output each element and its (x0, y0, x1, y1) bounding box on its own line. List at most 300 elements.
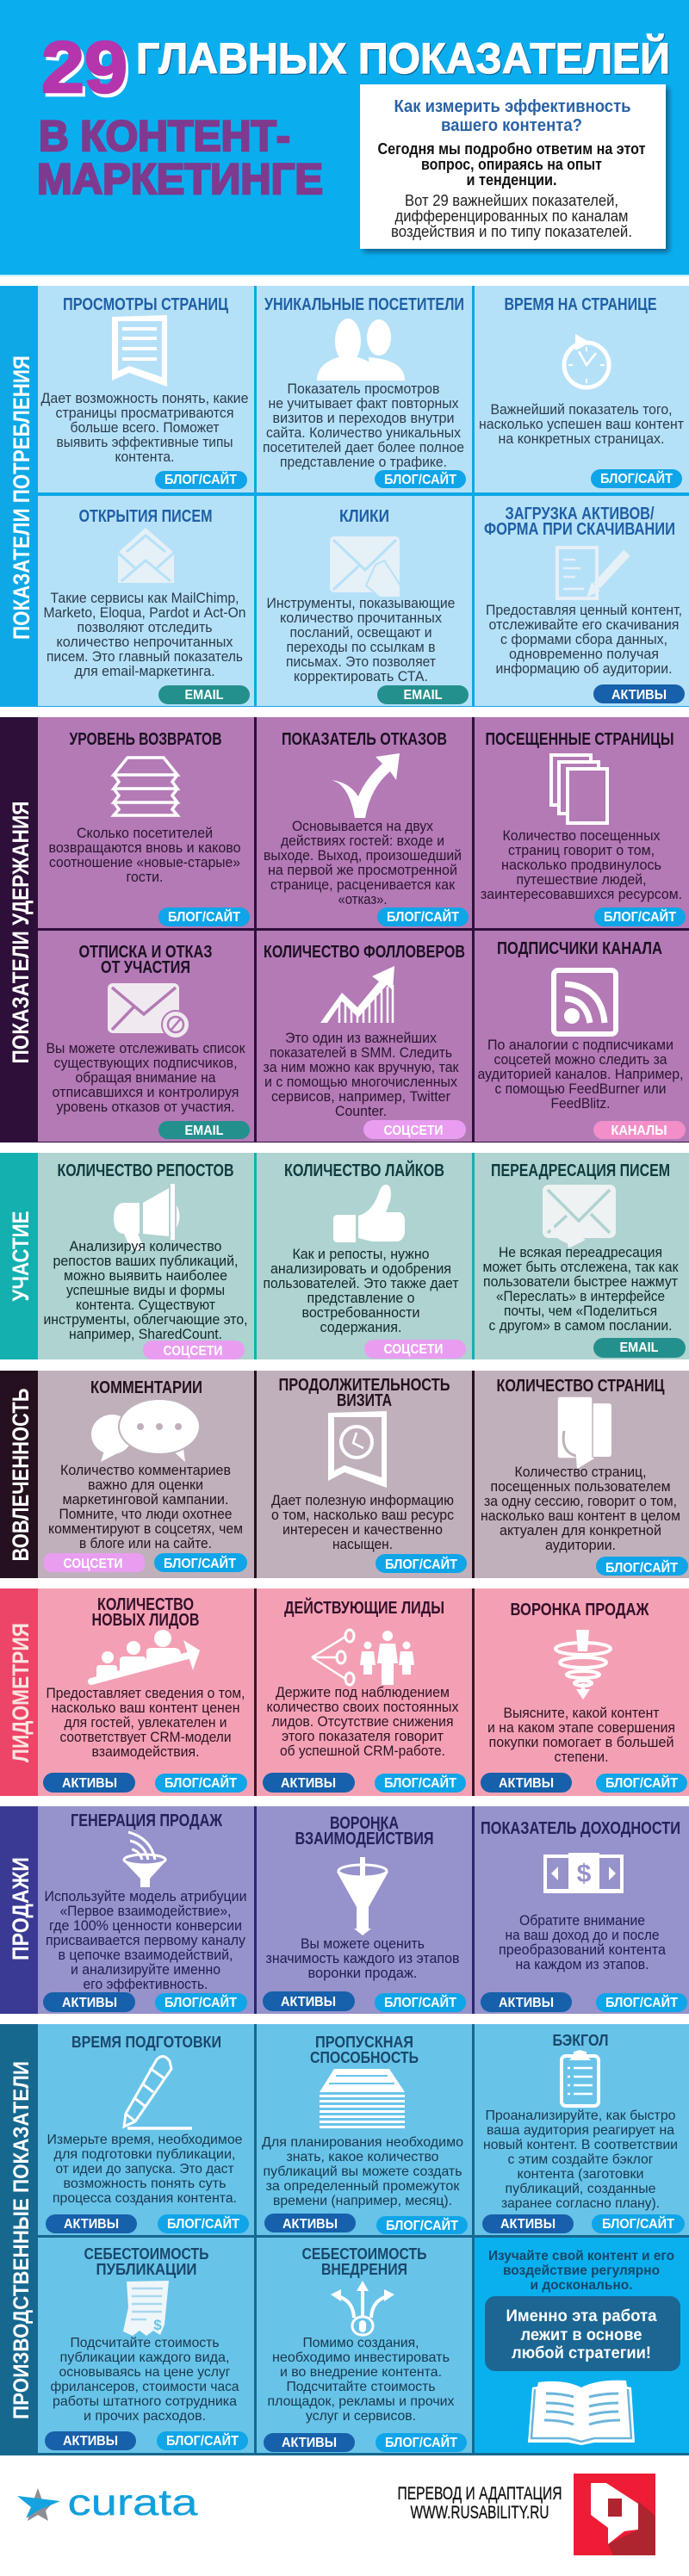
badge: БЛОГ/САЙТ (386, 2218, 458, 2233)
icon: envelope with hand (330, 536, 400, 598)
text: Помимо создания, (303, 2336, 419, 2350)
badge: АКТИВЫ (281, 1776, 336, 1791)
text: за ним можно как вручную, так (264, 1059, 459, 1075)
text: соотношение «новые-старые» (49, 854, 240, 870)
badge (375, 1774, 466, 1793)
text: комментируют в соцсетях, чем (48, 1520, 243, 1537)
text (483, 2108, 678, 2211)
text: например, SharedCount. (69, 1326, 222, 1342)
heading (301, 2245, 427, 2278)
text: Подсчитайте стоимость (71, 2336, 219, 2350)
text: аудитории. (545, 1537, 616, 1553)
text (264, 1246, 459, 1335)
heading: ВРЕМЯ ПОДГОТОВКИ (71, 2034, 221, 2051)
icon: funnel with arrow (337, 1857, 388, 1935)
card: воронка продаж (475, 1588, 689, 1796)
text: с формами сбора данных, (500, 631, 667, 647)
icon: pages with arrow (557, 1396, 611, 1469)
card: продолжительность визита (257, 1371, 472, 1578)
badge (481, 1773, 572, 1793)
card: воронка взаимодействия (257, 1806, 472, 2014)
logo: curata: curata (67, 2482, 198, 2523)
text: и во внедрение контента. (280, 2365, 442, 2380)
badge: КАНАЛЫ (611, 1124, 667, 1138)
badge: БЛОГ/САЙТ (167, 2216, 239, 2232)
icon: open envelope (118, 528, 174, 583)
badge (376, 1554, 467, 1573)
text: Marketo, Eloqua, Pardot и Act-On (43, 604, 246, 621)
badge: АКТИВЫ (62, 1996, 117, 2010)
icon: clipboard (562, 2050, 599, 2106)
text: услуг и сервисов. (306, 2409, 416, 2424)
text: уровень отказов от участия. (57, 1099, 234, 1115)
text: одновременно получая (509, 646, 659, 662)
callout: лежит в основе (520, 2326, 642, 2344)
text: переходы по ссылкам в (286, 639, 436, 655)
text (47, 1685, 245, 1760)
badge (45, 2431, 136, 2450)
badge (263, 1773, 355, 1793)
text: Это один из важнейших (285, 1030, 437, 1046)
text: для гостей, увлекателен и (64, 1714, 227, 1731)
heading: БЭКГОЛ (553, 2032, 608, 2049)
text: Проанализируйте, как быстро (486, 2108, 676, 2123)
heading: КЛИКИ (339, 507, 389, 526)
card: уникальные посетители (257, 286, 472, 492)
icon: check arrow (331, 753, 400, 818)
text: в цепочке взаимодействий, (59, 1947, 233, 1963)
badge (481, 1992, 572, 2012)
card: переадресация писем (475, 1153, 689, 1359)
text: выявить эффективные типы (57, 434, 233, 450)
text (499, 1912, 667, 1972)
badge (43, 1992, 135, 2012)
text (48, 825, 241, 885)
badge: БЛОГ/САЙТ (605, 1775, 678, 1791)
heading (79, 943, 212, 977)
card: загрузка активов (475, 496, 689, 706)
badge: EMAIL (620, 1341, 658, 1355)
intro box: Вот 29 важнейших показателей, (405, 192, 618, 209)
icon: envelope blocked (108, 983, 189, 1038)
text: присваивается первому каналу (46, 1932, 245, 1948)
text: насыщен. (332, 1536, 393, 1552)
heading (295, 1814, 434, 1848)
text: маркетинговой кампании. (62, 1491, 229, 1508)
heading: ПРОСМОТРЫ СТРАНИЦ (63, 295, 228, 314)
text: площадок, рекламы и прочих (267, 2394, 455, 2409)
text: путешествие людей, (517, 871, 646, 888)
text: показателей в SMM. Следить (270, 1044, 452, 1061)
card: себестоимость публикации (38, 2238, 254, 2453)
badge: БЛОГ/САЙТ (384, 472, 456, 487)
heading (91, 1595, 200, 1630)
sidebar label: ПОКАЗАТЕЛИ УДЕРЖАНИЯ (8, 801, 34, 1064)
text: Дает возможность понять, какие (41, 390, 248, 406)
text: Дает полезную информацию (271, 1492, 454, 1508)
credit text: WWW.RUSABILITY.RU (410, 2503, 549, 2523)
text: контента (заготовки (517, 2167, 644, 2182)
icon: clock (564, 334, 609, 387)
icon: tornado funnel (556, 1630, 611, 1700)
badge: БЛОГ/САЙТ (168, 909, 240, 925)
text: репостов ваших публикаций, (53, 1253, 238, 1269)
badge (596, 1993, 687, 2012)
text: публикации каждого вида, (60, 2350, 229, 2365)
card: количество репостов (38, 1153, 254, 1359)
heading: ЗАГРУЗКА АКТИВОВ/ (505, 505, 655, 523)
text: этого показателя говорит (282, 1728, 444, 1744)
card: отписка (38, 931, 254, 1142)
text: больше всего. Поможет (71, 419, 220, 436)
icon: people (317, 319, 405, 381)
sidebar label: ПОКАЗАТЕЛИ ПОТРЕБЛЕНИЯ (9, 356, 34, 640)
text: за определенный промежуток (265, 2179, 461, 2194)
card: себестоимость внедрения (257, 2238, 472, 2453)
text: для подготовки публикации, (53, 2147, 236, 2162)
heading: КОЛИЧЕСТВО (97, 1595, 194, 1614)
text: Измерьте время, необходимое (47, 2133, 243, 2147)
sidebar label: ПРОДАЖИ (8, 1857, 34, 1960)
badge (158, 1121, 250, 1139)
badge (154, 1553, 247, 1572)
card: бэкгол (475, 2024, 689, 2235)
text (43, 1238, 248, 1342)
icon: growth chart (320, 966, 394, 1023)
text: представление о трафике. (280, 454, 447, 470)
text: Предоставляет сведения о том, (47, 1685, 245, 1701)
text: и на каком этапе совершения (487, 1719, 675, 1736)
text: Важнейший показатель того, (491, 401, 672, 418)
icon: chat bubbles (91, 1399, 200, 1462)
heading: УРОВЕНЬ ВОЗВРАТОВ (69, 730, 222, 749)
badge: СОЦСЕТИ (164, 1344, 222, 1359)
text: письмах. Это позволяет (286, 653, 436, 670)
badge (482, 2214, 574, 2233)
text (265, 1935, 460, 1981)
text: пользователи быстрее нажмут (483, 1273, 678, 1290)
badge: БЛОГ/САЙТ (385, 1557, 457, 1572)
badge (155, 1993, 247, 2012)
card: closing message (475, 2238, 689, 2453)
card: количество страниц (475, 1371, 689, 1578)
heading: СПОСОБНОСТЬ (310, 2049, 419, 2066)
card: просмотры страниц (38, 286, 254, 492)
badge: АКТИВЫ (499, 1996, 554, 2010)
badge: СОЦСЕТИ (64, 1557, 122, 1571)
text: насколько продвинулось (501, 857, 661, 873)
text: его эффективность. (83, 1976, 208, 1992)
text: процесса создания контента. (53, 2191, 237, 2206)
text: значимость каждого из этапов (265, 1950, 460, 1966)
text: и с помощью многочисленных (264, 1074, 457, 1090)
badge (377, 685, 469, 704)
text: соцсетей можно следить за (494, 1051, 667, 1068)
text (481, 827, 682, 902)
text: посещенных пользователем (491, 1478, 670, 1495)
panel: показатели удержания (0, 717, 689, 1142)
icon: forwarded envelope (543, 1185, 616, 1248)
text: лидов. Отсутствие снижения (272, 1713, 453, 1730)
title line 2 (37, 112, 323, 203)
icon: money (543, 1853, 624, 1893)
icon: open book (528, 2381, 635, 2445)
text: «отказ». (338, 891, 388, 907)
text: контента. Существуют (76, 1297, 215, 1313)
icon: pencil (124, 2056, 192, 2128)
badge (377, 907, 469, 926)
text (41, 390, 248, 465)
text: на ваш доход до и после (505, 1927, 660, 1943)
heading: СЕБЕСТОИМОСТЬ (84, 2245, 209, 2263)
text: Выясните, какой контент (503, 1705, 660, 1721)
badge (158, 907, 250, 926)
heading (84, 2245, 209, 2278)
text: отписавшихся и контролируя (52, 1084, 239, 1100)
badge (155, 471, 247, 489)
text: содержания. (320, 1319, 401, 1335)
badge (593, 684, 685, 703)
text: количество своих постоянных (267, 1699, 459, 1715)
badge: БЛОГ/САЙТ (604, 909, 676, 925)
badge (376, 2216, 468, 2234)
panel: участие (0, 1153, 689, 1359)
text: Не всякая переадресация (499, 1244, 662, 1260)
text: информацию об аудитории. (496, 660, 672, 677)
badge: БЛОГ/САЙТ (605, 1995, 678, 2010)
heading: ГЕНЕРАЦИЯ ПРОДАЖ (71, 1811, 223, 1830)
heading: ПУБЛИКАЦИИ (96, 2261, 196, 2278)
text: Инструменты, показывающие (267, 595, 455, 611)
badge: БЛОГ/САЙТ (164, 1556, 236, 1571)
badge (375, 470, 466, 488)
text: действиях гостей: входе и (281, 833, 444, 849)
badge (375, 1993, 466, 2012)
text: можно выявить наиболее (64, 1267, 227, 1284)
text: необходимо инвестировать (272, 2350, 450, 2365)
text: с другом» в самом послании. (489, 1317, 672, 1334)
text: Анализируя количество (69, 1238, 222, 1254)
text: возможность понять суть (64, 2177, 226, 2191)
icon: funnel with signal (122, 1832, 167, 1887)
text: основываясь на цене услуг (59, 2365, 231, 2380)
text: преобразований контента (499, 1941, 667, 1958)
text: Сколько посетителей (77, 825, 213, 841)
text: от идеи до запуска. Это даст (55, 2162, 234, 2177)
intro box: Сегодня мы подробно ответим на этот (377, 140, 646, 158)
text: Используйте модель атрибуции (45, 1888, 246, 1904)
text: взаимодействия. (91, 1743, 200, 1760)
title line 1: ГЛАВНЫХ ПОКАЗАТЕЛЕЙ (136, 34, 670, 83)
heading: ДЕЙСТВУЮЩИЕ ЛИДЫ (284, 1597, 444, 1618)
text (263, 381, 464, 470)
text (481, 1464, 680, 1553)
panel: продажи (0, 1806, 689, 2014)
badge (264, 2214, 356, 2232)
badge (596, 1557, 688, 1576)
badge: АКТИВЫ (64, 2217, 119, 2232)
badge: БЛОГ/САЙТ (387, 909, 459, 925)
text: Количество страниц, (515, 1464, 646, 1480)
intro box: дифференцированных по каналам (394, 207, 629, 225)
badge: СОЦСЕТИ (384, 1342, 443, 1357)
intro box: и тенденции. (467, 171, 556, 189)
heading: ВИЗИТА (337, 1391, 392, 1410)
badge: БЛОГ/САЙТ (385, 2435, 457, 2450)
text: за одну сессию, говорит о том, (484, 1493, 677, 1509)
sidebar label: ЛИДОМЕТРИЯ (8, 1623, 34, 1762)
text: Вы можете отслеживать список (47, 1040, 245, 1056)
title line 2: МАРКЕТИНГЕ (37, 155, 323, 203)
badge: АКТИВЫ (611, 688, 667, 703)
text: на первой же просмотренной (268, 862, 457, 878)
text (262, 2135, 463, 2208)
heading: ВОРОНКА ПРОДАЖ (510, 1601, 649, 1619)
text: публикаций вы можете создать (264, 2164, 462, 2179)
text: количество прочитанных (280, 610, 442, 626)
heading (279, 1376, 450, 1410)
text: сайта. Количество уникальных (266, 424, 461, 441)
credit text (398, 2484, 562, 2523)
badge (155, 1774, 247, 1793)
text: с помощью FeedBurner или (494, 1081, 667, 1097)
badge (157, 2431, 248, 2450)
heading: ПОКАЗАТЕЛЬ ОТКАЗОВ (282, 730, 447, 749)
badge: АКТИВЫ (500, 2217, 556, 2232)
text: инструменты, облегчающие это, (43, 1311, 248, 1328)
text: Помните, что люди охотнее (59, 1506, 233, 1522)
badge (376, 2433, 467, 2452)
text: «Первое взаимодействие», (60, 1903, 231, 1919)
intro box (360, 84, 669, 252)
logo: curata (17, 2482, 198, 2523)
badge: БЛОГ/САЙТ (164, 1995, 237, 2010)
card: показатель отказов (257, 717, 472, 928)
badge: АКТИВЫ (282, 2436, 337, 2450)
icon: pages (551, 755, 607, 823)
card: открытия писем (38, 496, 254, 706)
icon: stack of paper (320, 2069, 405, 2128)
intro box: воздействия и по типу показателей. (391, 223, 632, 240)
header banner (0, 0, 689, 276)
card: пропускная способность (257, 2024, 472, 2235)
icon: network and people (312, 1630, 414, 1685)
badge (43, 1773, 135, 1793)
heading: КОЛИЧЕСТВО ЛАЙКОВ (284, 1160, 444, 1180)
text: с этим создайте бэклог (508, 2152, 654, 2167)
text: странице, расценивается как (270, 876, 456, 893)
callout (485, 2296, 680, 2371)
logo: rusability (574, 2474, 655, 2555)
text: новый контент. В соответствии (483, 2138, 678, 2152)
card: генерация продаж (38, 1806, 254, 2014)
badge (591, 469, 682, 488)
badge (263, 1991, 355, 2011)
heading: КОММЕНТАРИИ (90, 1378, 202, 1397)
text (488, 2249, 674, 2293)
badge (158, 685, 250, 704)
icon: document and pen (557, 548, 627, 598)
text: Показатель просмотров (288, 381, 439, 397)
badge: EMAIL (184, 688, 224, 703)
card: уровень возвратов (38, 717, 254, 928)
title line 2: В КОНТЕНТ- (39, 112, 290, 160)
text: на конкретных страницах. (498, 430, 665, 447)
text (45, 1888, 246, 1992)
footer (17, 2474, 655, 2555)
text: Изучайте свой контент и его (488, 2249, 674, 2263)
text: выходе. Выход, произошедший (264, 847, 462, 864)
panel: производственные показатели (0, 2024, 689, 2455)
card: клики (257, 496, 472, 706)
text: Для планирования необходимо (262, 2135, 463, 2150)
heading: ВНЕДРЕНИЯ (321, 2261, 407, 2278)
heading: НОВЫХ ЛИДОВ (91, 1611, 200, 1630)
text (271, 1492, 454, 1552)
intro box: вашего контента? (441, 116, 582, 135)
badge: АКТИВЫ (282, 2217, 338, 2232)
text: Основывается на двух (292, 818, 433, 834)
text: воронки продаж. (308, 1965, 417, 1981)
text: Вы можете оценить (301, 1935, 425, 1952)
heading: ВОРОНКА (330, 1814, 399, 1833)
text: где 100% ценности конверсии (49, 1917, 242, 1934)
badge: АКТИВЫ (62, 1776, 117, 1791)
badge: БЛОГ/САЙТ (384, 1775, 456, 1791)
badge: БЛОГ/САЙТ (602, 2216, 674, 2232)
card: количество фолловеров (257, 931, 472, 1142)
badge (143, 1341, 245, 1359)
heading: КОЛИЧЕСТВО РЕПОСТОВ (57, 1161, 234, 1180)
text: актуален для конкретной (500, 1522, 661, 1539)
text: фрилансеров, стоимости часа (50, 2380, 239, 2394)
icon: rss (554, 970, 616, 1034)
text (267, 595, 455, 684)
text: «Переслать» в интерфейсе (496, 1288, 665, 1304)
text: представление о (307, 1290, 415, 1306)
text: степени. (555, 1749, 608, 1765)
text: визитов и переходов внутри (272, 410, 455, 426)
badge: БЛОГ/САЙТ (164, 1775, 237, 1791)
text: посланий, освещают и (289, 624, 432, 641)
card: количество новых лидов (38, 1588, 254, 1796)
text (50, 2336, 239, 2424)
text: и анализируйте именно (71, 1961, 220, 1978)
text: страницы просматриваются (55, 405, 234, 421)
intro box: Как измерить эффективность (394, 97, 630, 116)
text: страниц говорит о том, (508, 842, 655, 858)
icon: thumb up (333, 1185, 405, 1242)
card: время подготовки (38, 2024, 254, 2235)
icon: stack of layers (114, 758, 177, 815)
text (264, 1030, 459, 1119)
text: позволяют отследить (78, 619, 213, 635)
icon: receipt (123, 2281, 169, 2336)
text: ваша аудитория реагирует на (487, 2123, 674, 2138)
text: может быть отслежена, так как (482, 1259, 679, 1275)
text: воздействие регулярно (503, 2263, 660, 2278)
text: Обратите внимание (519, 1912, 645, 1929)
text (47, 2133, 243, 2206)
text: Counter. (335, 1103, 387, 1119)
text: работы штатного сотрудника (53, 2394, 237, 2409)
badge: БЛОГ/САЙТ (605, 1560, 678, 1576)
text (267, 2336, 455, 2424)
text: для email-маркетинга. (74, 663, 215, 679)
badge: БЛОГ/САЙТ (384, 1995, 456, 2010)
card: комментарии (38, 1371, 254, 1578)
text: отслеживайте его скачивания (489, 616, 679, 633)
